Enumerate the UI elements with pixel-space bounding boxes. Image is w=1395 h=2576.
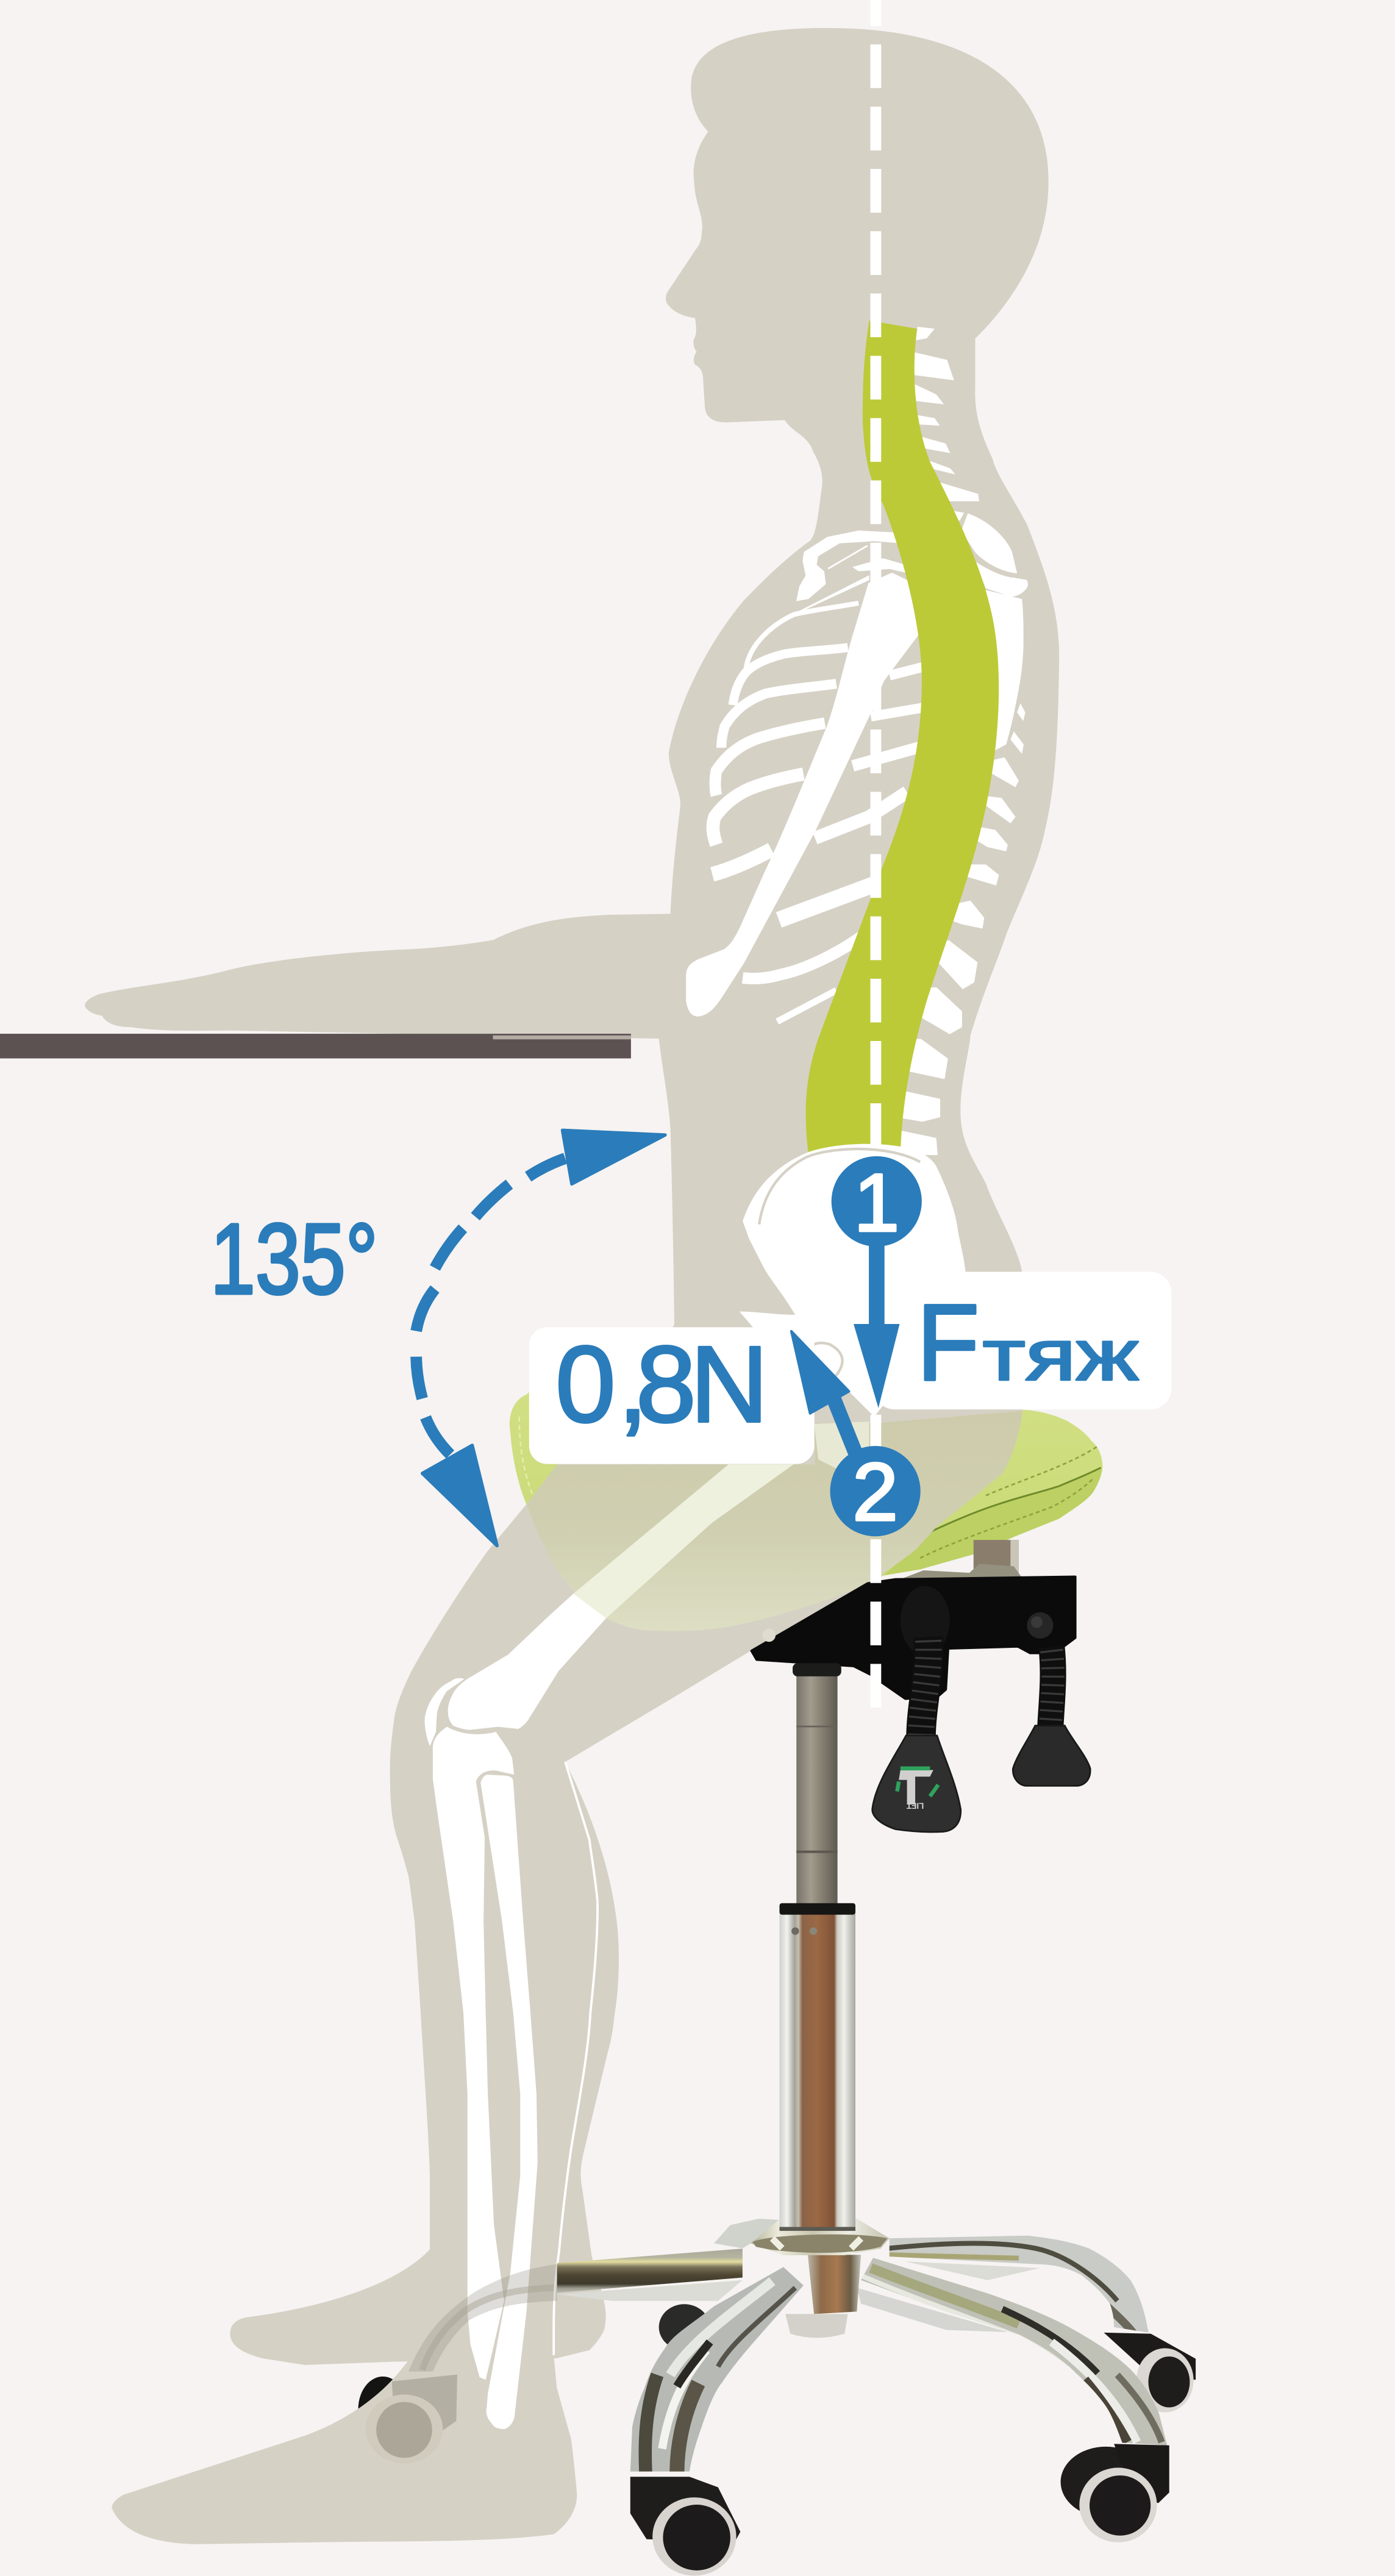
saddle stitches bbox=[920, 1447, 1097, 1558]
light underside wedge bbox=[905, 2261, 1040, 2280]
femur bbox=[448, 1464, 794, 1730]
gas lift rod bbox=[796, 1667, 838, 1909]
spine bbox=[806, 321, 999, 1154]
fibula bbox=[480, 1775, 538, 2429]
saddle seam bbox=[896, 1468, 1101, 1561]
calf line bbox=[554, 1762, 598, 2355]
hub ring bbox=[751, 2219, 890, 2255]
faded hood bbox=[392, 2375, 457, 2431]
front-right leg bbox=[861, 2258, 1167, 2445]
skeleton bbox=[424, 327, 1028, 2429]
far leg silhouette bbox=[230, 1762, 619, 2365]
angle label: 135° bbox=[210, 1203, 378, 1315]
chair seat bracket bbox=[896, 1540, 1022, 1581]
back hub lobe bbox=[714, 2219, 779, 2249]
label: 0,8 N bbox=[529, 1323, 815, 1464]
lever logo: LIFT bbox=[906, 1801, 924, 1810]
front-left leg bbox=[630, 2267, 804, 2474]
saddle lower band bbox=[883, 1468, 1102, 1575]
centre column bbox=[808, 2255, 861, 2314]
pubic tip bbox=[740, 1312, 805, 1334]
faded rear-left leg and caster bbox=[366, 2264, 557, 2464]
front-right caster bbox=[1061, 2444, 1169, 2542]
front-left caster bbox=[630, 2477, 740, 2575]
vertical centre dashed line bbox=[874, 0, 878, 1708]
arrow: counter force bbox=[791, 1331, 856, 1454]
saddle left stitch bbox=[519, 1417, 536, 1502]
chair base bbox=[557, 2219, 1196, 2575]
marker 1 bbox=[832, 1156, 922, 1248]
rear-left leg opaque segment bbox=[557, 2249, 743, 2301]
left lever bbox=[872, 1637, 961, 1832]
tibia bbox=[433, 1727, 514, 2380]
pelvis seen through the saddle bbox=[815, 1422, 869, 1472]
rear-right caster bbox=[1104, 2333, 1196, 2413]
angle arc dashed arrow bbox=[416, 1130, 665, 1546]
pelvis outline bbox=[759, 1149, 920, 1389]
ribs bbox=[712, 603, 929, 1021]
label: 0,8 N: 0,8 N bbox=[555, 1323, 768, 1445]
light underside wedge of front leg bbox=[857, 2288, 1008, 2332]
chrome sleeve bbox=[779, 1903, 855, 2231]
knee cap bbox=[424, 1678, 465, 1746]
faded wheel bbox=[366, 2394, 443, 2464]
lever logo bbox=[897, 1769, 938, 1810]
marker 2 bbox=[830, 1446, 921, 1538]
label: F tension: тяж bbox=[983, 1315, 1139, 1396]
humerus bbox=[687, 574, 929, 1015]
saddle seat bbox=[510, 1315, 1102, 1631]
plastic foot bbox=[785, 2314, 848, 2338]
marker 2: 2 bbox=[852, 1446, 898, 1538]
collar bone and scapula bbox=[793, 531, 908, 614]
shoulder blade bbox=[962, 513, 1028, 755]
pelvis bbox=[740, 1144, 969, 1472]
arrow: force down bbox=[854, 1225, 899, 1408]
label: F tension bbox=[874, 1272, 1171, 1409]
marker 1: 1 bbox=[854, 1156, 899, 1248]
small seat bolt bbox=[762, 1629, 776, 1642]
table top bbox=[0, 1034, 631, 1059]
near body silhouette bbox=[85, 28, 1059, 2544]
hidden rear wheel bbox=[659, 2304, 710, 2350]
rear caster back wheel bbox=[359, 2377, 407, 2442]
chair mechanism plate bbox=[752, 1576, 1076, 1698]
rear-right leg bbox=[889, 2236, 1149, 2334]
right lever bbox=[1013, 1647, 1090, 1786]
cervical and thoracic vertebrae bbox=[896, 327, 1026, 1155]
label: F tension: F bbox=[917, 1282, 979, 1403]
saddle seen through the body bbox=[526, 1411, 1022, 1631]
